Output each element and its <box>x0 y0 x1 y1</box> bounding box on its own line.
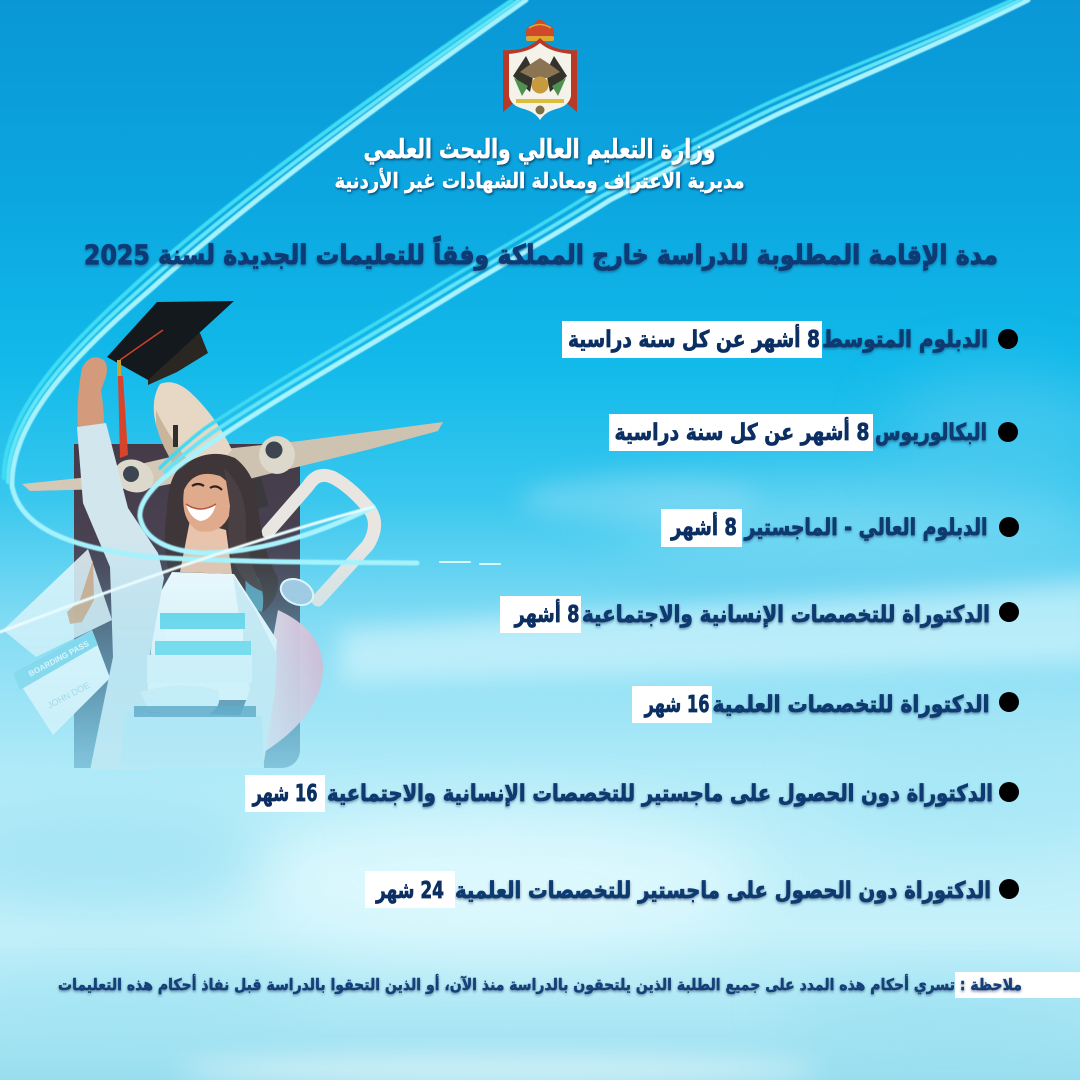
mantle <box>503 38 577 112</box>
boarding papers: JOHN DOE <box>46 680 91 711</box>
list item: PhD sciences <box>632 686 1019 723</box>
flags <box>513 56 534 92</box>
ministry name: وزارة التعليم العالي والبحث العلمي <box>364 135 716 165</box>
list item: PhD humanities <box>500 596 1019 633</box>
dark rounded panel <box>74 444 300 768</box>
shield <box>509 43 571 120</box>
list item: PhD without master humanities <box>245 775 1019 812</box>
streak left loop <box>4 0 526 564</box>
list item: PhD sciences: 16 شهر <box>644 692 710 718</box>
hand under books <box>140 685 219 716</box>
list item: intermediate diploma <box>562 321 1018 358</box>
icon: graduation cap <box>107 301 234 458</box>
tail to lower left <box>0 507 373 632</box>
raised arm <box>78 357 107 428</box>
icon: stack of books <box>147 613 252 683</box>
list item: higher diploma and master: 8 أشهر <box>670 511 737 541</box>
icon: airplane <box>22 382 443 509</box>
list item: PhD humanities: الدكتوراة للتخصصات الإنسانية والاجتماعية <box>582 602 990 628</box>
icon: coat of arms of Jordan <box>503 19 577 120</box>
jeans <box>120 712 264 768</box>
light streaks <box>0 0 1028 632</box>
list item: PhD without master sciences: 24 شهر <box>375 878 444 904</box>
white top <box>146 572 277 700</box>
luggage pink side <box>262 610 323 752</box>
list item: intermediate diploma: الدبلوم المتوسط <box>822 327 988 353</box>
hair front <box>224 468 264 592</box>
sunglasses <box>280 578 314 606</box>
face <box>183 474 233 532</box>
neck <box>180 520 232 574</box>
list item: bachelor <box>609 414 1018 451</box>
crown <box>526 19 554 41</box>
list item: PhD sciences: الدكتوراة للتخصصات العلمية <box>712 692 990 718</box>
list item: bachelor: البكالوريوس <box>875 420 987 446</box>
star <box>536 106 544 114</box>
list item: higher diploma and master: الدبلوم العالي - الماجستير <box>744 515 988 541</box>
list item: PhD humanities: 8 أشهر <box>514 598 580 628</box>
illustration: student with plane and luggage <box>3 301 443 770</box>
streak right loop <box>140 0 1028 553</box>
directorate name: مديرية الاعتراف ومعادلة الشهادات غير الأردنية <box>334 167 744 193</box>
jacket left panel <box>77 423 164 770</box>
list item: higher diploma and master <box>661 509 1019 547</box>
list item: intermediate diploma: 8 أشهر عن كل سنة دراسية <box>568 323 820 353</box>
globe <box>532 76 548 94</box>
icon: luggage handle <box>268 475 375 600</box>
boarding papers: BOARDING PASS <box>27 639 91 678</box>
boarding papers <box>3 549 112 735</box>
ribbon <box>516 99 564 103</box>
list item: bachelor: 8 أشهر عن كل سنة دراسية <box>614 416 870 446</box>
list item: PhD without master humanities: 16 شهر <box>252 781 318 807</box>
hair <box>165 454 278 612</box>
list item: PhD without master sciences: الدكتوراة دون الحصول على ماجستير للتخصصات العلمية <box>455 878 991 904</box>
eagle <box>520 58 560 78</box>
jacket right panel <box>233 576 277 764</box>
list item: PhD without master sciences <box>365 871 1019 908</box>
